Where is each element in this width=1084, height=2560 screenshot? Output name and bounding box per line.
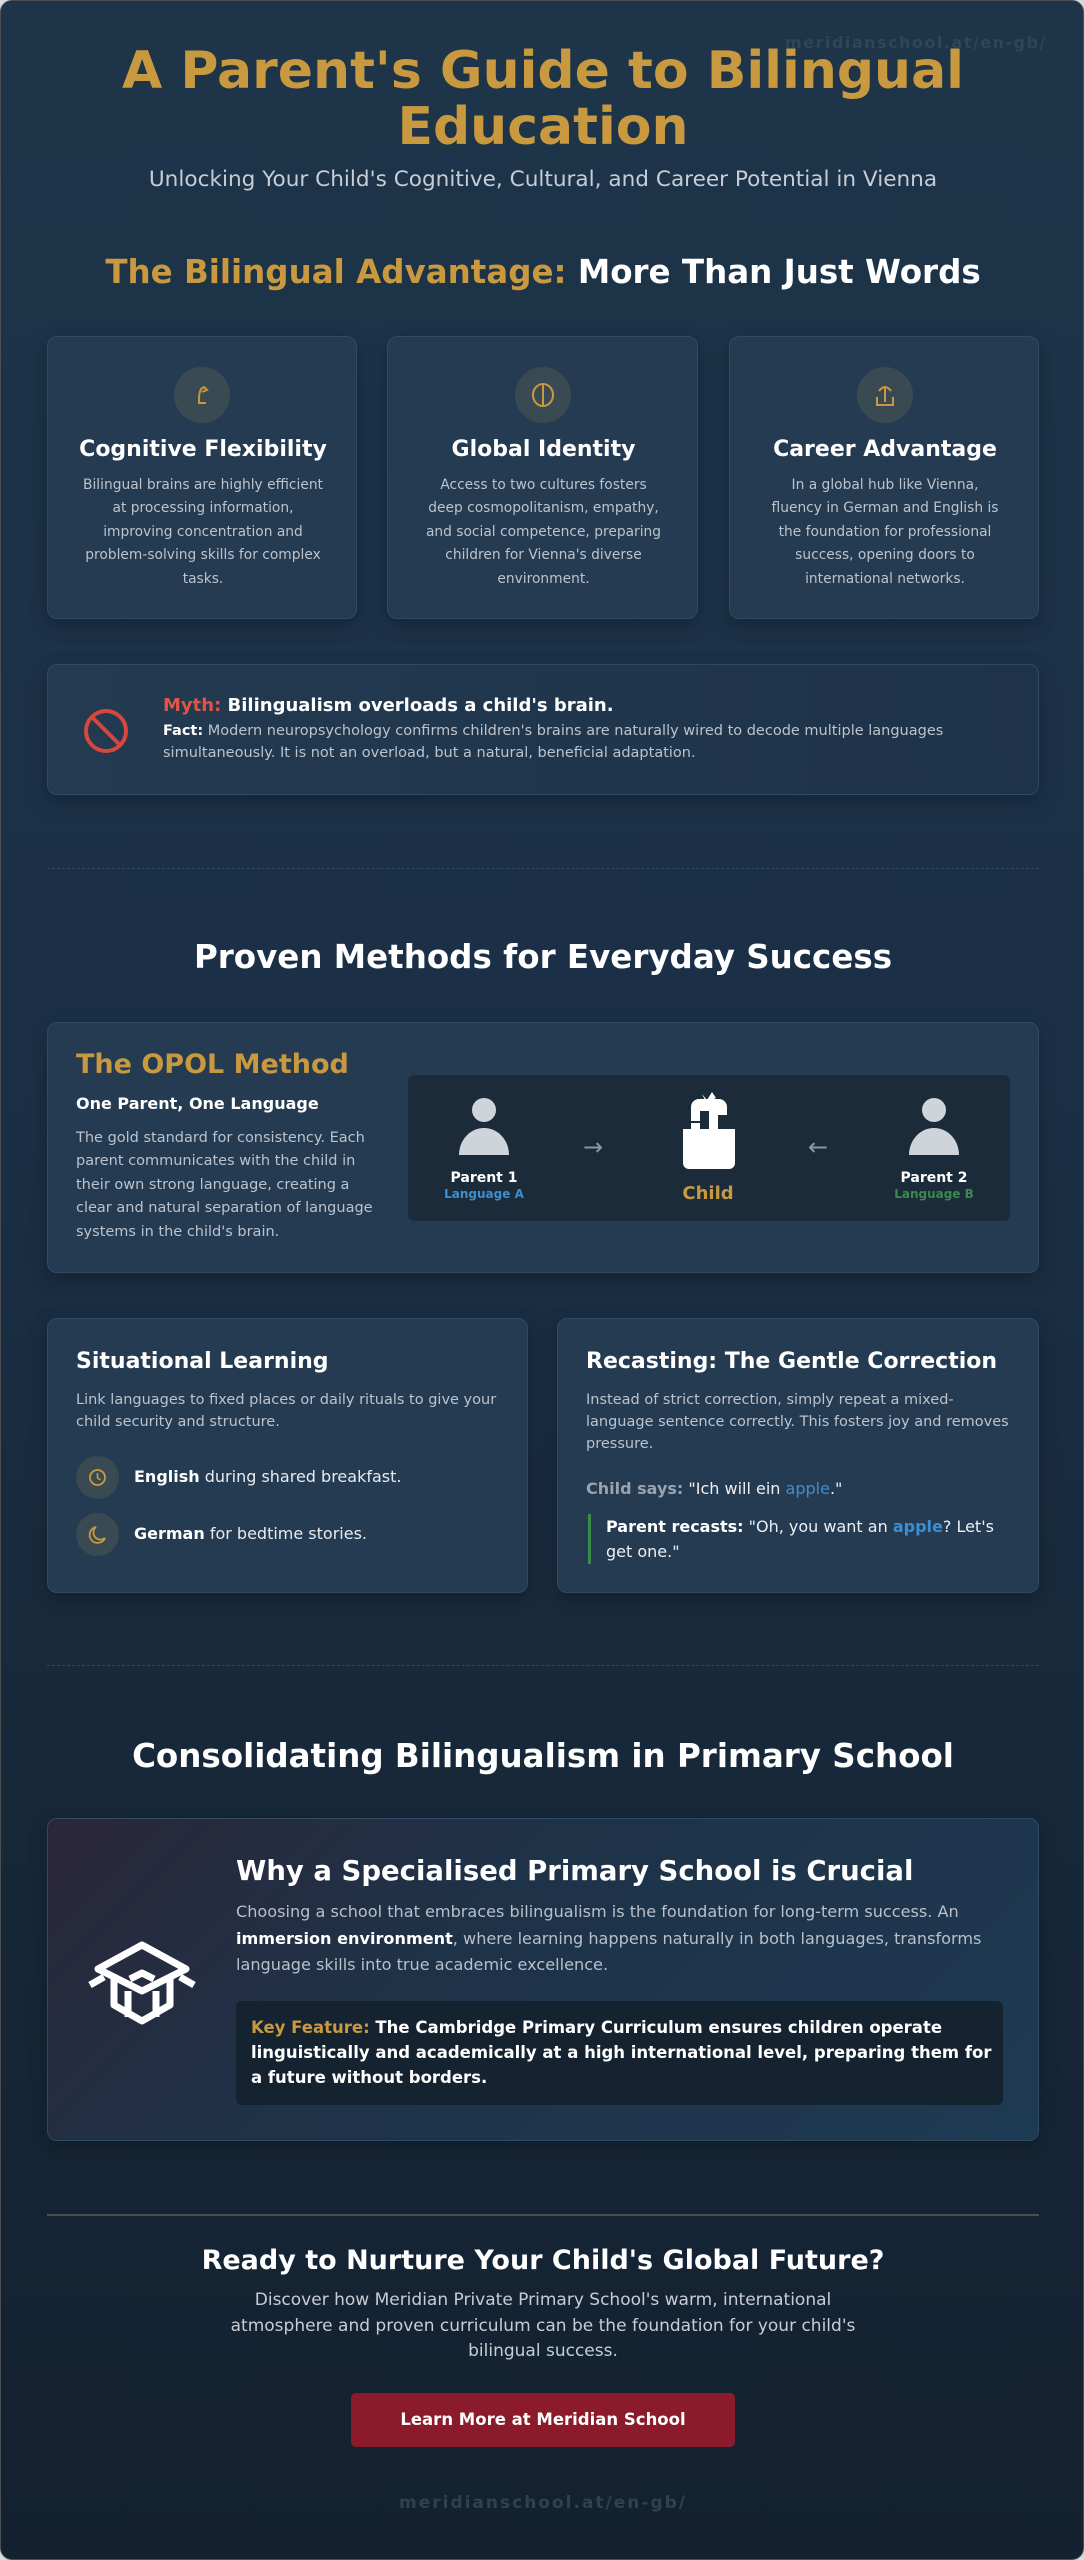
heading: primary school: Consolidating Bilingualism in Primary School <box>132 1737 954 1775</box>
icon: globe <box>515 367 571 423</box>
item: german bedtime <box>76 1513 367 1556</box>
heading: bilingual advantage: The Bilingual Advantage: More Than Just Words <box>105 253 981 291</box>
panel: cognitive flexibility <box>47 336 357 619</box>
icon: parent 1 <box>459 1098 509 1155</box>
key feature box: Key Feature: The Cambridge Primary Curriculum ensures children operate linguistically and academically at a high international level, preparing them for a future without borders. <box>251 2018 992 2087</box>
panel: situational learning <box>47 1318 528 1593</box>
icon: child <box>683 1092 735 1169</box>
button: Learn More at Meridian School <box>400 2410 686 2429</box>
title: A Parent's Guide to Bilingual <box>122 41 964 101</box>
OPOL title: The OPOL Method <box>76 1049 349 1080</box>
title: Recasting: The Gentle Correction <box>586 1349 997 1374</box>
label: child: Child <box>682 1183 734 1204</box>
icon: prohibited <box>84 709 128 753</box>
diagram: OPOL <box>408 1075 1010 1221</box>
subtitle: Unlocking Your Child's Cognitive, Cultural, and Career Potential in Vienna <box>149 167 937 192</box>
OPOL text: The gold standard for consistency. Each parent communicates with the child in their own strong language, creating a clear and natural separation of language systems in the child's brain. <box>76 1130 373 1240</box>
card title: Cognitive Flexibility <box>79 437 327 462</box>
heading: proven methods: Proven Methods for Everyday Success <box>194 938 892 976</box>
watermark: top: meridianschool.at/en-gb/ <box>785 33 1047 52</box>
label: parent 1: Language A <box>444 1187 524 1201</box>
item: english breakfast: English during shared breakfast. <box>134 1467 401 1486</box>
parent recasts: Parent recasts: "Oh, you want an apple? Let's get one." <box>606 1517 994 1561</box>
text: Link languages to fixed places or daily rituals to give your child security and structure. <box>76 1392 496 1430</box>
item: german bedtime: German for bedtime stories. <box>134 1524 367 1543</box>
myth text: Fact: Modern neuropsychology confirms children's brains are naturally wired to decode multiple languages simultaneously. It is not an overload, but a natural, beneficial adaptation. <box>163 723 943 761</box>
myth text <box>163 695 943 761</box>
panel: global identity <box>387 336 698 619</box>
label: parent 2: Parent 2 <box>900 1170 968 1186</box>
watermark: footer: meridianschool.at/en-gb/ <box>399 2493 687 2513</box>
CTA text: Discover how Meridian Private Primary School's warm, international atmosphere and proven curriculum can be the foundation for your child's bilingual success. <box>231 2290 855 2361</box>
arrow right: → <box>583 1133 603 1161</box>
panel: career advantage <box>729 336 1039 619</box>
card text: Access to two cultures fosters deep cosmopolitanism, empathy, and social competence, preparing children for Vienna's diverse environment. <box>426 477 661 587</box>
panel: OPOL method <box>47 1022 1039 1273</box>
icon: moon <box>76 1513 119 1556</box>
card title: Global Identity <box>452 437 635 462</box>
panel: recasting <box>557 1318 1039 1593</box>
CTA heading: Ready to Nurture Your Child's Global Future? <box>202 2245 884 2276</box>
child says: Child says: "Ich will ein apple." <box>586 1479 842 1498</box>
title: Education <box>397 97 689 157</box>
arrow left: ← <box>808 1133 828 1161</box>
icon: graduation cap <box>88 1942 196 2024</box>
icon: career <box>857 367 913 423</box>
label: parent 2: Language B <box>894 1187 974 1201</box>
title <box>122 41 964 157</box>
text: Instead of strict correction, simply repeat a mixed-language sentence correctly. This fosters joy and removes pressure. <box>586 1392 1009 1452</box>
card title: Career Advantage <box>773 437 997 462</box>
icon: brain <box>174 367 230 423</box>
item: english breakfast <box>76 1456 401 1499</box>
title: Why a Specialised Primary School is Crucial <box>236 1855 913 1887</box>
button <box>351 2393 735 2447</box>
card text: Bilingual brains are highly efficient at processing information, improving concentration and problem-solving skills for complex tasks. <box>83 477 323 587</box>
card text: In a global hub like Vienna, fluency in German and English is the foundation for professional success, opening doors to international networks. <box>772 477 998 587</box>
title: Situational Learning <box>76 1349 329 1374</box>
myth text: Myth: Bilingualism overloads a child's brain. <box>163 695 614 716</box>
key feature box <box>236 2001 1003 2105</box>
panel: specialised school <box>47 1818 1039 2141</box>
panel: myth <box>47 664 1039 795</box>
icon: clock <box>76 1456 119 1499</box>
label: parent 2 <box>894 1170 974 1201</box>
label: parent 1 <box>444 1170 524 1201</box>
label: parent 1: Parent 1 <box>450 1170 518 1186</box>
icon: parent 2 <box>909 1098 959 1155</box>
OPOL subtitle: One Parent, One Language <box>76 1094 319 1113</box>
text: Choosing a school that embraces bilingualism is the foundation for long-term success. An immersion environment, where learning happens naturally in both languages, transforms language skills into true academic excellence. <box>236 1902 981 1974</box>
